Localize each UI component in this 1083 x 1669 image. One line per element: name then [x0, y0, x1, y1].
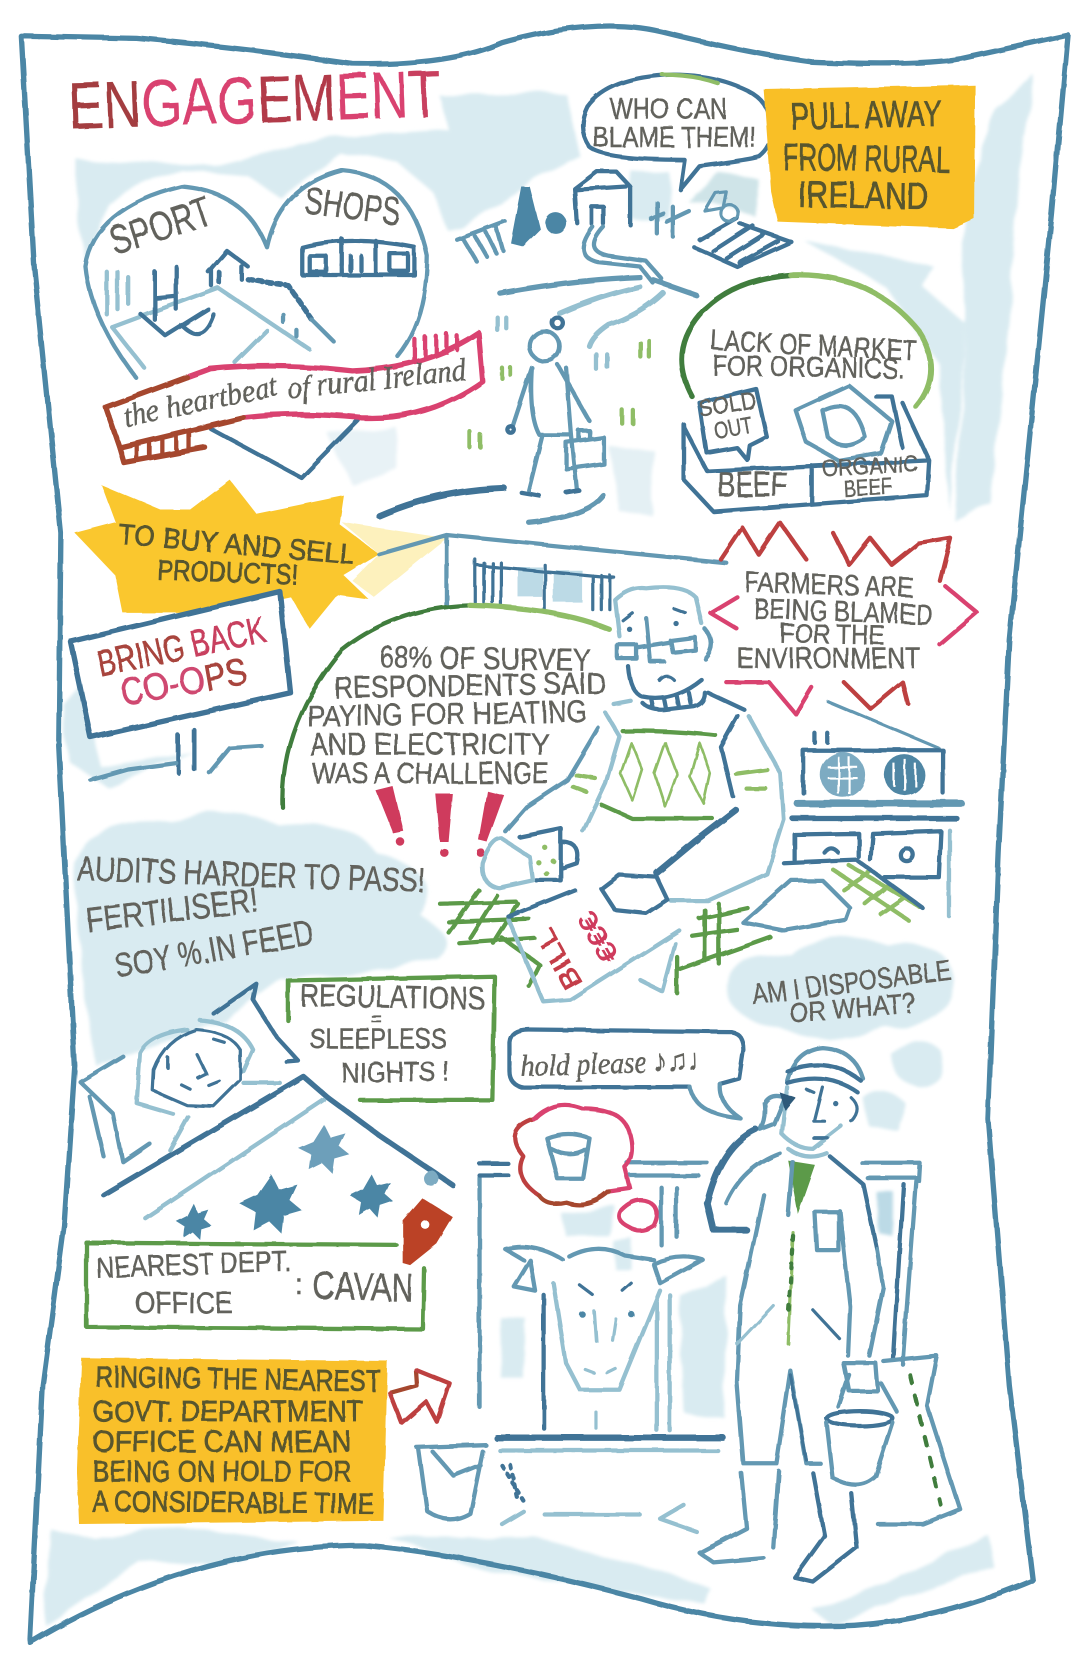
label: bill: BILL [530, 924, 587, 994]
phone hand [760, 1096, 785, 1130]
label: shops: SHOPS [302, 179, 403, 234]
yellow callout: pull away: IRELAND [798, 173, 929, 217]
cloud text: disposable: AM I DISPOSABLE [750, 955, 953, 1011]
face [553, 1283, 660, 1390]
red burst: farmers blamed: ENVIRONMENT [737, 643, 921, 675]
hat [787, 1048, 863, 1081]
cloud text: disposable: OR WHAT? [788, 987, 917, 1030]
regulations box: REGULATIONS [300, 977, 485, 1016]
sign: bring back co-ops [70, 592, 291, 780]
green bubble: heating survey: AND ELECTRICITY [310, 727, 549, 762]
map pin [403, 1198, 453, 1265]
red burst: farmers blamed [710, 522, 977, 714]
banner text [120, 351, 468, 434]
stall rails [480, 1163, 723, 1451]
sack [878, 1356, 960, 1524]
yellow callout: ringing [77, 1358, 388, 1524]
icon: meat package [796, 386, 892, 460]
icon: two people [650, 202, 689, 237]
hold please bubble [509, 1030, 743, 1118]
nearest office box [87, 1243, 424, 1329]
label: organic beef [821, 450, 919, 502]
lack of market bubble: LACK OF MARKET [710, 325, 917, 367]
green bubble: heating survey: RESPONDENTS SAID [334, 665, 606, 705]
icon: tractor [705, 192, 726, 211]
green bubble: heating survey: WAS A CHALLENGE [312, 755, 549, 790]
heart with sport and shops [85, 171, 427, 477]
boots [700, 1471, 779, 1562]
red burst: farmers blamed: FARMERS ARE [744, 567, 914, 604]
banner: heartbeat [106, 333, 483, 463]
lack of market bubble: FOR ORGANICS. [712, 350, 905, 385]
lack of market bubble [681, 275, 931, 407]
nearest office box: CAVAN [312, 1263, 414, 1311]
farmer on phone [700, 1048, 960, 1582]
icon: winding road [583, 227, 662, 283]
thought cloud: bucket [515, 1105, 632, 1204]
yellow callout: ringing: GOVT. DEPARTMENT [93, 1396, 363, 1429]
icon: hedge [248, 279, 312, 320]
walking figure [379, 318, 649, 522]
speech bubble: who can blame them: BLAME THEM! [593, 122, 756, 154]
tablecloth [440, 860, 922, 993]
cloud text: audits [77, 849, 426, 986]
arm [707, 1130, 756, 1230]
icon: right field [694, 218, 791, 266]
exclamation marks [376, 787, 504, 857]
road strokes [379, 488, 504, 516]
label: beef: BEEF [718, 466, 787, 505]
beard and collar [628, 666, 744, 710]
bucket on floor [417, 1445, 696, 1532]
icon: suitcase [566, 431, 603, 469]
label: euros: €€€ [572, 907, 625, 968]
cloud text: audits: SOY %.IN FEED [112, 913, 317, 986]
hair [569, 1249, 654, 1260]
grass tufts [470, 341, 649, 448]
yellow burst: buy and sell [75, 480, 446, 629]
hands [483, 839, 533, 888]
nearest office box: NEAREST DEPT. [95, 1245, 292, 1285]
yellow callout: pull away [764, 85, 975, 228]
farm scene [457, 172, 791, 346]
bucket [838, 1363, 897, 1412]
red burst: farmers blamed: BEING BLAMED [753, 593, 933, 631]
sign: bring back co-ops: BRING BACK [93, 608, 269, 685]
droppings [502, 1465, 523, 1501]
icon: trees [511, 187, 566, 246]
sign: sold out [697, 387, 767, 460]
yellow burst: buy and sell: PRODUCTS! [157, 555, 299, 592]
cloud text: disposable [750, 955, 953, 1030]
face [782, 1087, 842, 1149]
label: organic beef: BEEF [843, 473, 893, 502]
speech tail [214, 984, 298, 1062]
sign: bring back co-ops: CO-OPS [117, 650, 250, 713]
sleeping person in bed [80, 984, 453, 1239]
shed behind farmer [379, 535, 726, 610]
green bubble: heating survey: PAYING FOR HEATING [307, 694, 588, 734]
bill [508, 890, 679, 1002]
nearest office box: OFFICE [135, 1287, 233, 1320]
ears [505, 1247, 703, 1291]
sign: sold out: OUT [712, 412, 754, 444]
icon: shop row [302, 239, 414, 275]
nearest office box: : [295, 1268, 303, 1301]
face [646, 618, 664, 662]
yellow callout: ringing: OFFICE CAN MEAN [93, 1426, 351, 1459]
banner text: of rural Ireland [285, 351, 468, 406]
label: organic beef: ORGANIC [821, 450, 919, 481]
green bubble: heating survey: 68% OF SURVEY [379, 639, 591, 678]
worried farmer at table [483, 587, 784, 913]
icon: barn [575, 172, 630, 225]
cow [505, 1247, 703, 1428]
mug [519, 828, 578, 880]
icon: sports pitch [107, 266, 310, 368]
yellow callout: pull away: PULL AWAY [790, 92, 942, 137]
dresser [792, 804, 961, 917]
regulations box: SLEEPLESS [310, 1024, 446, 1056]
green bubble: heating survey [283, 605, 609, 808]
jumper pattern [601, 731, 716, 819]
jumper outline [583, 701, 784, 901]
pillow [80, 1056, 150, 1162]
blanket [104, 1076, 453, 1195]
meat stall [684, 386, 929, 512]
banner text: the heartbeat [120, 366, 281, 434]
zip [788, 1233, 794, 1344]
yellow callout: ringing: A CONSIDERABLE TIME [92, 1485, 374, 1521]
yellow burst: buy and sell: TO BUY AND SELL [117, 519, 356, 571]
collar and jumper [788, 1149, 827, 1157]
sign: sold out: SOLD [697, 387, 758, 424]
radio [803, 701, 943, 797]
yellow callout: ringing: BEING ON HOLD FOR [93, 1455, 351, 1488]
yellow callout: pull away: FROM RURAL [783, 135, 950, 180]
icon: left field [457, 222, 505, 261]
cloud text: audits: FERTILISER! [84, 881, 260, 940]
hold please bubble: hold please ♪♫♩ [520, 1042, 716, 1083]
regulations box: = [371, 1009, 382, 1030]
title: ENGAGEMENT [67, 57, 441, 144]
cloud text: audits: AUDITS HARDER TO PASS! [77, 849, 426, 900]
pink flower [619, 1200, 657, 1231]
flowers [176, 1124, 439, 1239]
arrow [390, 1370, 450, 1423]
icon: small clubhouse [208, 250, 248, 286]
regulations box: NIGHTS ! [341, 1056, 450, 1090]
suit outline [830, 1156, 877, 1249]
yellow callout: ringing: RINGING THE NEAREST [95, 1361, 382, 1399]
speech bubble: who can blame them [583, 75, 771, 190]
door behind [862, 1163, 920, 1364]
label: sport: SPORT [104, 187, 218, 264]
hair [137, 1020, 253, 1150]
speech bubble: who can blame them: WHO CAN [610, 93, 727, 125]
regulations box [288, 976, 495, 1100]
glasses [617, 637, 695, 659]
red burst: farmers blamed: FOR THE [780, 618, 885, 650]
hair and head [615, 587, 702, 636]
head [153, 1030, 240, 1106]
